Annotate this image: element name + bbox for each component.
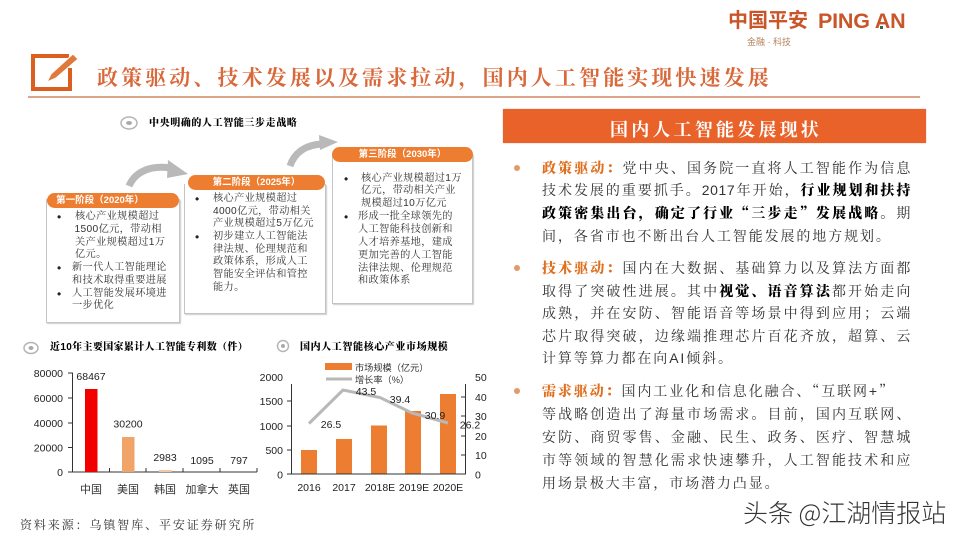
- bar chart: patents by country: 加拿大: [186, 482, 218, 496]
- stage three text: 形成一批全球领先的: [358, 211, 453, 222]
- stage three text: 和政策体系: [358, 275, 411, 286]
- combo chart: market size and growth: 26.2: [460, 420, 480, 432]
- text block: demand driver: 用场景极大丰富，市场潜力凸显。: [542, 475, 780, 491]
- combo chart: market size and growth: 2016: [297, 482, 321, 494]
- stage three text: •: [344, 210, 349, 224]
- stage three text: 人才培养基地，建成: [358, 237, 453, 248]
- stage two text: •: [195, 230, 200, 244]
- text block: technology driver: 芯片取得突破，边缘端推理芯片百花齐放，超算、云: [542, 328, 911, 344]
- stage one text: 1500亿元，带动相: [74, 224, 162, 235]
- icon: pencil and square: [31, 54, 78, 91]
- stage two text: 核心产业规模超过: [213, 193, 297, 204]
- stage two text: [195, 192, 314, 293]
- stage one text: •: [57, 286, 62, 300]
- text block: policy driver: 政策驱动：党中央、国务院一直将人工智能作为信息: [542, 160, 911, 176]
- title: 政策驱动、技术发展以及需求拉动，国内人工智能实现快速发展: [97, 62, 772, 92]
- text block: technology driver: 计算等算力都在向AI倾斜。: [542, 350, 734, 366]
- bar chart: patents by country: 30200: [113, 418, 143, 430]
- text block: technology driver: 取得了突破性进展。其中视觉、语音算法都开始走向: [542, 283, 911, 299]
- bar chart: patents by country: 英国: [228, 482, 250, 496]
- stage one text: 一步优化: [72, 300, 114, 311]
- stage one text: 亿元。: [75, 249, 107, 260]
- stage three text: 亿元，带动相关产业: [361, 185, 456, 196]
- combo chart: market size and growth: 1000: [260, 421, 283, 433]
- bar chart: patents by country: 60000: [34, 393, 63, 405]
- text block: demand driver: 市等领域的智慧化需求快速攀升，人工智能技术和应: [542, 452, 911, 468]
- bar chart: patents by country: [34, 368, 258, 496]
- stage one text: [57, 210, 167, 311]
- combo chart: market size and growth: 0: [277, 470, 283, 482]
- heading: patents chart: 近10年主要国家累计人工智能专利数（件）: [50, 342, 248, 353]
- text block: policy driver: 政策密集出台，确定了行业“三步走”发展战略。期: [542, 203, 911, 223]
- combo chart: market size and growth: 40: [475, 392, 487, 404]
- logo: Ping An: PING AN: [818, 9, 905, 33]
- stage one text: 人工智能发展环境进: [72, 288, 167, 298]
- combo chart: market size and growth: 26.5: [321, 419, 341, 431]
- combo chart: market size and growth: 增长率（%）: [355, 374, 409, 385]
- stage three header: 第三阶段（2030年）: [359, 149, 446, 160]
- stage two header: 第二阶段（2025年）: [213, 177, 300, 188]
- combo chart: market size and growth: 2000: [260, 372, 283, 384]
- panel: stage two: [184, 175, 328, 316]
- stage two text: 智能安全评估和管控: [213, 269, 308, 280]
- combo chart: market size and growth: 市场规模（亿元）: [355, 362, 428, 373]
- text block: demand driver: 需求驱动：国内工业化和信息化融合、“互联网+”: [542, 381, 895, 401]
- title rule: [28, 96, 920, 98]
- bar chart: patents by country: 80000: [34, 368, 63, 380]
- stage three text: •: [344, 172, 349, 186]
- logo: Ping An: 金融 · 科技: [747, 37, 791, 47]
- logo: Ping An: 中国平安: [728, 10, 808, 32]
- bar chart: patents by country: 0: [57, 467, 63, 479]
- text block: technology driver: [514, 260, 911, 366]
- stage one header: 第一阶段（2020年）: [56, 195, 144, 206]
- combo chart: market size and growth: 30: [475, 411, 487, 423]
- stage one text: •: [57, 261, 62, 275]
- panel: stage one: [46, 193, 182, 324]
- stage three text: 人工智能科技创新和: [358, 224, 453, 235]
- combo chart: market size and growth: 10: [475, 450, 487, 462]
- bar chart: patents by country: 68467: [76, 371, 106, 383]
- stage one text: 和技术取得重要进展: [72, 275, 167, 286]
- combo chart: market size and growth: 2018E: [365, 482, 395, 494]
- heading: patents chart: [23, 340, 248, 354]
- stage two text: 政策体系，形成人工: [213, 256, 308, 267]
- panel header: current status: [503, 109, 926, 143]
- bar chart: patents by country: 2983: [153, 452, 177, 464]
- stage one text: 核心产业规模超过: [75, 211, 159, 222]
- arrow: stage two to three: [286, 135, 338, 167]
- combo chart: market size and growth: 20: [475, 431, 487, 443]
- text block: demand driver: 安防、商贸零售、金融、民生、政务、医疗、智慧城: [542, 429, 911, 445]
- watermark: 头条 @江湖情报站: [743, 494, 946, 530]
- bar chart: patents by country: 中国: [80, 483, 102, 496]
- combo chart: market size and growth: 2019E: [399, 482, 429, 494]
- bar chart: patents by country: 韩国: [154, 482, 176, 496]
- stage one text: 关产业规模超过1万: [75, 236, 165, 248]
- combo chart: market size and growth: 30.9: [425, 410, 445, 422]
- stage two text: 产业规模超过5万亿元: [213, 218, 314, 229]
- arrow: stage one to two: [126, 160, 188, 188]
- stage one text: 新一代人工智能理论: [72, 262, 167, 273]
- stage three header: [332, 147, 473, 162]
- text block: policy driver: 技术发展的重要抓手。2017年开始，行业规划和扶持: [542, 182, 911, 198]
- stage three text: 规模超过10万亿元: [361, 198, 447, 209]
- logo: Ping An: [728, 9, 905, 47]
- stage two text: 律法规、伦理规范和: [213, 244, 308, 254]
- stage two header: [188, 175, 325, 190]
- bar chart: patents by country: 美国: [117, 483, 139, 496]
- stage three text: 更加完善的人工智能: [358, 250, 453, 261]
- panel: stage three: [332, 147, 474, 306]
- combo chart: market size and growth: [260, 362, 487, 494]
- combo chart: market size and growth: 39.4: [390, 394, 410, 406]
- stage three text: 法律法规、伦理规范: [358, 263, 453, 274]
- text block: technology driver: 技术驱动：国内在大数据、基础算力以及算法方面都: [542, 260, 911, 276]
- heading: market size chart: 国内人工智能核心产业市场规模: [300, 338, 448, 353]
- source note: 资料来源：乌镇智库、平安证券研究所: [20, 516, 256, 533]
- combo chart: market size and growth: 1500: [260, 396, 283, 408]
- text block: technology driver: 成熟，并在安防、智能语音等场景中得到应用；云端: [542, 305, 911, 321]
- text block: demand driver: [514, 381, 911, 491]
- heading: three step strategy: 中央明确的人工智能三步走战略: [149, 114, 297, 129]
- combo chart: market size and growth: 500: [265, 445, 283, 457]
- bar chart: patents by country: 797: [230, 455, 248, 467]
- stage two text: •: [195, 192, 200, 206]
- bar chart: patents by country: 1095: [190, 455, 214, 467]
- text block: policy driver: [514, 160, 911, 244]
- text block: demand driver: 等战略创造出了海量市场需求。目前，国内互联网、: [542, 406, 911, 422]
- bar chart: patents by country: 20000: [34, 442, 63, 454]
- stage one header: [47, 193, 179, 208]
- stage three text: 核心产业规模超过1万: [361, 173, 462, 184]
- stage two text: 初步建立人工智能法: [213, 231, 308, 242]
- combo chart: market size and growth: 43.5: [356, 386, 376, 398]
- combo chart: market size and growth: 0: [475, 470, 481, 482]
- combo chart: market size and growth: 2017: [332, 482, 356, 494]
- panel header: current status: 国内人工智能发展现状: [610, 116, 822, 142]
- bar chart: patents by country: 40000: [34, 418, 63, 430]
- combo chart: market size and growth: 2020E: [433, 482, 463, 494]
- combo chart: market size and growth: 50: [475, 372, 487, 384]
- stage two text: 能力。: [213, 282, 245, 293]
- stage two text: 4000亿元，带动相关: [213, 206, 311, 217]
- text block: policy driver: 间，各省市也不断出台人工智能发展的地方规划。: [542, 228, 892, 244]
- stage three text: [344, 172, 462, 286]
- stage one text: •: [57, 210, 62, 224]
